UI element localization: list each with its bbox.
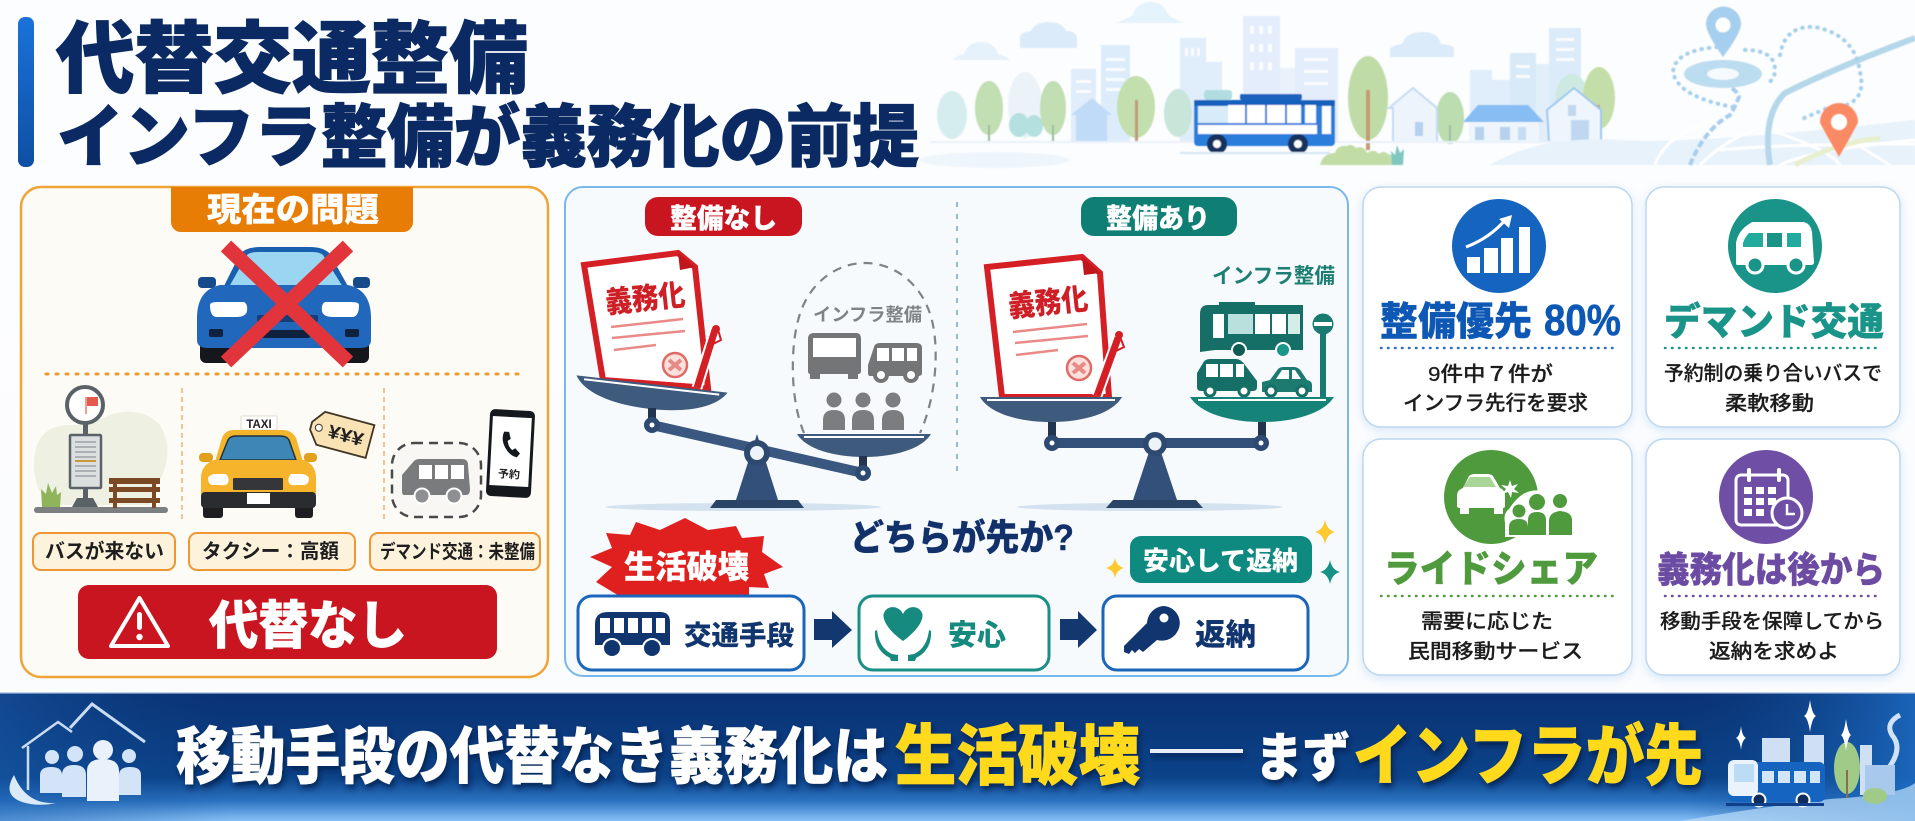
heading tab [171,187,413,232]
title line 1: 代替交通整備 [56,15,528,103]
icon: teal vehicles and stop [1197,302,1334,397]
icon: heart in hands [875,607,931,661]
icon: rising bar chart [1452,199,1546,293]
sparkles [1106,520,1340,584]
question heading: どちらが先か? [850,517,1074,558]
scale pan: mandate side [980,397,1122,422]
scale pan: infrastructure side [1190,397,1334,422]
badge: without infrastructure: 整備なし [670,204,777,234]
clouds [952,2,1454,60]
flow box: transport: 交通手段 [684,621,794,651]
card title: 整備優先 [1380,301,1532,344]
card: rideshare [1363,439,1632,675]
title line 2: インフラ整備が義務化の前提 [57,100,919,176]
dotted route [1673,27,1861,119]
footer message: 移動手段の代替なき義務化は [176,723,888,792]
card: mandate later [1646,439,1900,675]
card description: 移動手段を保障してから [1660,610,1884,633]
icon: taxi with price tag: ¥¥¥ [325,422,366,451]
balance beam and stand [644,408,871,508]
infrastructure label: インフラ整備 [1212,265,1335,288]
icon: demand van and phone [392,409,535,517]
card stat: 80% [1544,296,1621,345]
icon: warning triangle [111,598,168,646]
divider [46,372,523,376]
footer message: まず [1255,730,1350,788]
label: no bus [33,533,175,570]
card description: 予約制の乗り合いバスで [1664,362,1882,385]
scale pan: left [574,375,728,417]
title [18,15,919,176]
icon: taxi with price tag [199,409,374,518]
location pin: blue [1684,7,1762,88]
badge: return with peace of mind: 安心して返納 [1143,546,1298,576]
location pin: orange [1820,103,1858,157]
panel: scale comparison [565,187,1348,676]
card description: 返納を求めよ [1709,640,1839,663]
panel: current problem [21,187,548,677]
flow box: peace of mind [859,596,1049,670]
card description: インフラ先行を要求 [1403,392,1588,415]
card description: 柔軟移動 [1725,392,1814,415]
icon: key [1124,606,1180,654]
bus [1180,90,1335,154]
badge: return with peace of mind [1130,536,1312,583]
starburst: life destruction [590,518,783,597]
label: demand transit undeveloped: デマンド交通：未整備 [380,540,535,563]
badge: with infrastructure [1081,197,1237,236]
title accent bar [18,17,34,167]
arrow [1060,611,1097,648]
icon: taxi with price tag: TAXI [246,419,272,431]
balance beam and stand [1044,422,1269,508]
icon: van [1728,199,1822,293]
arrow [814,611,852,648]
icon: bus and city [1680,700,1915,821]
scale pan: right [797,434,931,457]
tilted scale: without infrastructure [574,253,936,511]
document: mandate (tilted): 義務化 [604,279,687,320]
document: mandate (tilted) [584,253,721,388]
label: no bus: バスが来ない [45,539,164,563]
icon: pen [1097,331,1124,396]
icon: house and people [10,704,145,805]
card description: 9件中７件が [1428,363,1554,386]
icon: crossed-out car [197,246,371,363]
buildings [1071,16,1581,142]
card description: 需要に応じた [1421,610,1553,633]
card title: デマンド交通 [1664,301,1884,344]
flow box: transport [578,596,804,670]
footer message [176,719,1703,793]
dashed missing infrastructure group: インフラ整備 [813,305,922,325]
houses [1071,88,1601,142]
label: demand transit undeveloped [370,533,540,570]
card: demand transit [1646,187,1900,427]
trees [937,56,1615,150]
starburst: life destruction: 生活破壊 [624,549,749,585]
heading tab: 現在の問題 [207,191,379,228]
badge: with infrastructure: 整備あり [1106,204,1210,234]
footer banner [0,692,1915,821]
icon: demand van and phone: 予約 [498,466,520,482]
header illustration: city, bus and map [920,2,1915,168]
footer message: 生活破壊 [895,719,1140,793]
dashed missing infrastructure group [793,263,936,433]
badge: without infrastructure [645,197,802,236]
ground [920,152,1070,168]
card title: 義務化は後から [1657,549,1885,590]
document: mandate (balanced): 義務化 [1007,283,1090,324]
document: mandate (balanced) [987,257,1124,397]
icon: bus [595,612,670,657]
icon: calendar and clock [1719,450,1813,544]
card description: 民間移動サービス [1408,640,1583,663]
map roads [1490,120,1915,165]
balanced scale: with infrastructure [980,257,1335,511]
card title: ライドシェア [1384,549,1598,591]
card: infrastructure priority 80% [1363,187,1632,427]
bushes [1320,145,1404,165]
icon: car and people [1444,450,1573,544]
label: taxi expensive: タクシー：高額 [202,540,339,563]
flow box: return license [1103,596,1308,670]
banner: no alternative: 代替なし [209,598,407,656]
icon: pen [697,325,721,388]
banner: no alternative [78,585,497,659]
flow box: peace of mind: 安心 [948,619,1006,652]
flow box: return license: 返納 [1195,619,1256,652]
icon: bus stop [34,387,168,513]
footer message: インフラが先 [1353,719,1703,793]
building windows [1076,26,1574,93]
label: taxi expensive [189,533,355,570]
